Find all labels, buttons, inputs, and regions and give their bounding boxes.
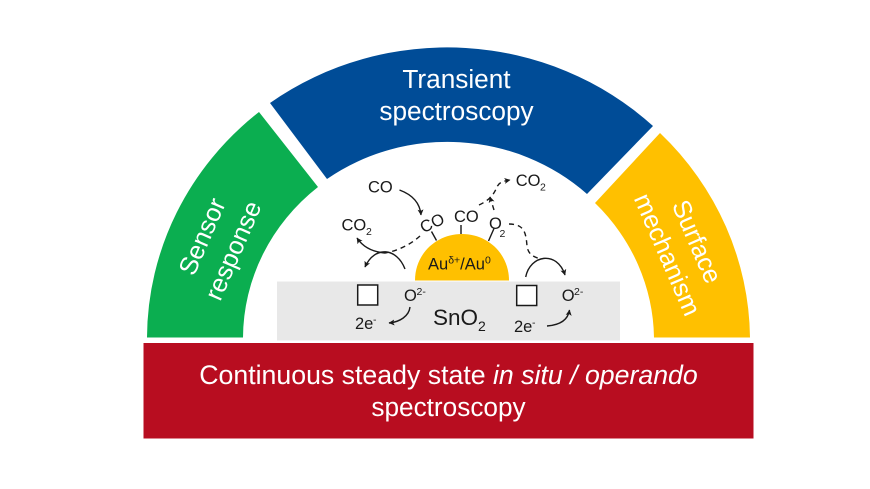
lattice oxygen and electrons: 2e (355, 315, 373, 333)
free CO and CO2 labels: CO (368, 178, 393, 196)
free CO and CO2 labels: 2 (540, 182, 546, 194)
lattice oxygen and electrons: 2e (514, 318, 532, 336)
gold nanoparticle: Au (428, 256, 448, 274)
lattice oxygen and electrons (355, 286, 584, 336)
lattice oxygen and electrons: O (404, 287, 417, 305)
panel: SnO2 support (277, 282, 620, 340)
panel: continuous spectroscopy: Continuous steady state in situ / operando (199, 360, 698, 390)
adsorbed species on gold: CO (417, 210, 448, 237)
free CO and CO2 labels: CO (342, 217, 366, 235)
panel: sensor response (147, 112, 318, 338)
panel: SnO2 support: SnO (433, 305, 478, 330)
lattice oxygen and electrons: O (562, 287, 575, 305)
lattice oxygen and electrons: 2- (574, 286, 584, 298)
gold nanoparticle (415, 234, 509, 280)
lattice oxygen and electrons: - (532, 317, 536, 329)
panel: surface mechanism: Surface (666, 196, 727, 288)
panel: surface mechanism: mechanism (628, 189, 706, 320)
arrow: CO adsorption (400, 190, 421, 215)
arrow: left CO oxidation to CO2 (357, 236, 420, 269)
arrow: O2 dissociation to lattice (509, 224, 565, 277)
gold nanoparticle: δ+ (448, 254, 460, 266)
panel: transient spectroscopy (270, 47, 653, 194)
gold nanoparticle: 0 (485, 254, 491, 266)
panel: sensor response: Sensor (174, 194, 232, 279)
arrow: right electron transfer (547, 310, 570, 326)
oxygen vacancies (358, 285, 537, 306)
free CO and CO2 labels: CO (516, 172, 541, 190)
adsorbed species on gold (417, 208, 506, 241)
panel: continuous spectroscopy: spectroscopy (371, 392, 527, 422)
gold nanoparticle: /Au (460, 256, 485, 274)
panel: SnO2 support: 2 (478, 318, 486, 334)
free CO and CO2 labels (342, 172, 546, 238)
arrow: left electron transfer (389, 307, 410, 323)
panel: surface mechanism (595, 133, 750, 338)
panel: transient spectroscopy: spectroscopy (379, 96, 535, 126)
panel: sensor response: response (200, 197, 267, 304)
panel: transient spectroscopy: Transient (402, 64, 511, 94)
adsorbed species on gold: CO (454, 208, 479, 226)
adsorbed species on gold: 2 (500, 228, 506, 240)
free CO and CO2 labels: 2 (366, 226, 372, 238)
arrow: top CO oxidation to CO2 (479, 180, 510, 210)
lattice oxygen and electrons: 2- (416, 286, 426, 298)
lattice oxygen and electrons: - (373, 314, 377, 326)
panel: continuous spectroscopy (144, 343, 754, 438)
adsorbed species on gold: O (489, 215, 502, 233)
